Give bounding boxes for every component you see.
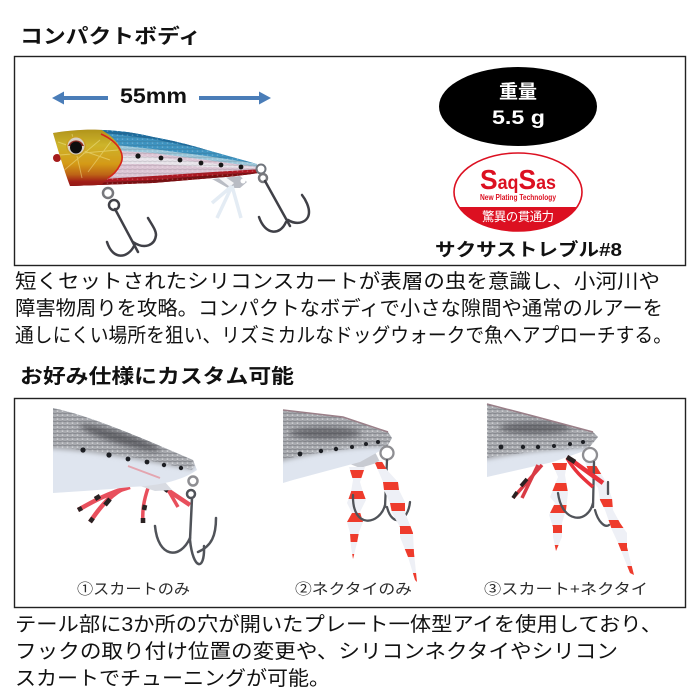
skirt strands xyxy=(78,485,190,523)
option 1: skirt only xyxy=(50,400,216,564)
plate xyxy=(140,482,172,491)
lure tail xyxy=(487,404,598,477)
plate xyxy=(345,452,380,468)
description text: compact body: 障害物周りを攻略。コンパクトなボディで小さな隙間や通常のルアーを xyxy=(15,297,663,320)
SaqSas logo: SaqSas xyxy=(480,164,556,195)
option 2: necktie only xyxy=(280,405,422,585)
heading: compact body: コンパクトボディ xyxy=(20,24,201,48)
front treble hook xyxy=(103,188,156,256)
treble hook xyxy=(353,446,410,521)
rear tie plate xyxy=(212,176,247,188)
heading: customization: お好み仕様にカスタム可能 xyxy=(20,365,294,388)
left necktie xyxy=(549,463,568,551)
panel: compact body xyxy=(14,56,686,266)
panel: customization options xyxy=(14,398,686,608)
rear treble hook xyxy=(259,174,309,232)
SaqSas logo: New Plating Technology xyxy=(480,193,556,202)
description text: compact body: 短くセットされたシリコンスカートが表層の虫を意識し、小河川や xyxy=(15,270,660,293)
weight badge: 重量 xyxy=(499,81,537,103)
arrow: right length arrow xyxy=(199,92,271,104)
lure eye xyxy=(66,136,86,156)
weight badge: 5.5 g xyxy=(492,108,545,129)
description text: compact body: 通しにくい場所を狙い、リズミカルなドッグウォークで魚へアプローチする。 xyxy=(15,324,672,347)
lure side dots xyxy=(135,153,243,169)
description text: customization xyxy=(15,613,662,690)
option 3: skirt plus necktie xyxy=(485,400,638,578)
right necktie xyxy=(375,460,417,582)
skirt strands xyxy=(513,457,603,498)
length label: 55mm xyxy=(120,85,187,108)
lure photo xyxy=(50,125,309,256)
description text: customization: スカートでチューニングが可能。 xyxy=(15,667,330,690)
description text: compact body xyxy=(15,270,672,347)
lure tail xyxy=(53,408,197,493)
description text: customization: テール部に3か所の穴が開いたプレート一体型アイを使用しており、 xyxy=(15,613,662,636)
SaqSas logo: 驚異の貫通力 xyxy=(482,209,554,224)
SaqSas logo xyxy=(454,153,582,231)
treble hook xyxy=(155,476,216,564)
lure tail xyxy=(283,410,392,483)
option 1 caption: ①スカートのみ xyxy=(77,581,190,598)
description text: customization: フックの取り付け位置の変更や、シリコンネクタイやシリコン xyxy=(15,640,618,663)
option 2 caption: ②ネクタイのみ xyxy=(295,581,412,598)
right necktie xyxy=(585,462,634,575)
treble hook xyxy=(558,448,609,526)
left necktie xyxy=(347,467,366,559)
option 3 caption: ③スカート+ネクタイ xyxy=(484,581,648,598)
arrow: left length arrow xyxy=(52,92,108,104)
lure body xyxy=(53,130,258,186)
weight badge xyxy=(439,67,597,146)
hook model label: サクサストレブル#8 xyxy=(435,239,622,260)
